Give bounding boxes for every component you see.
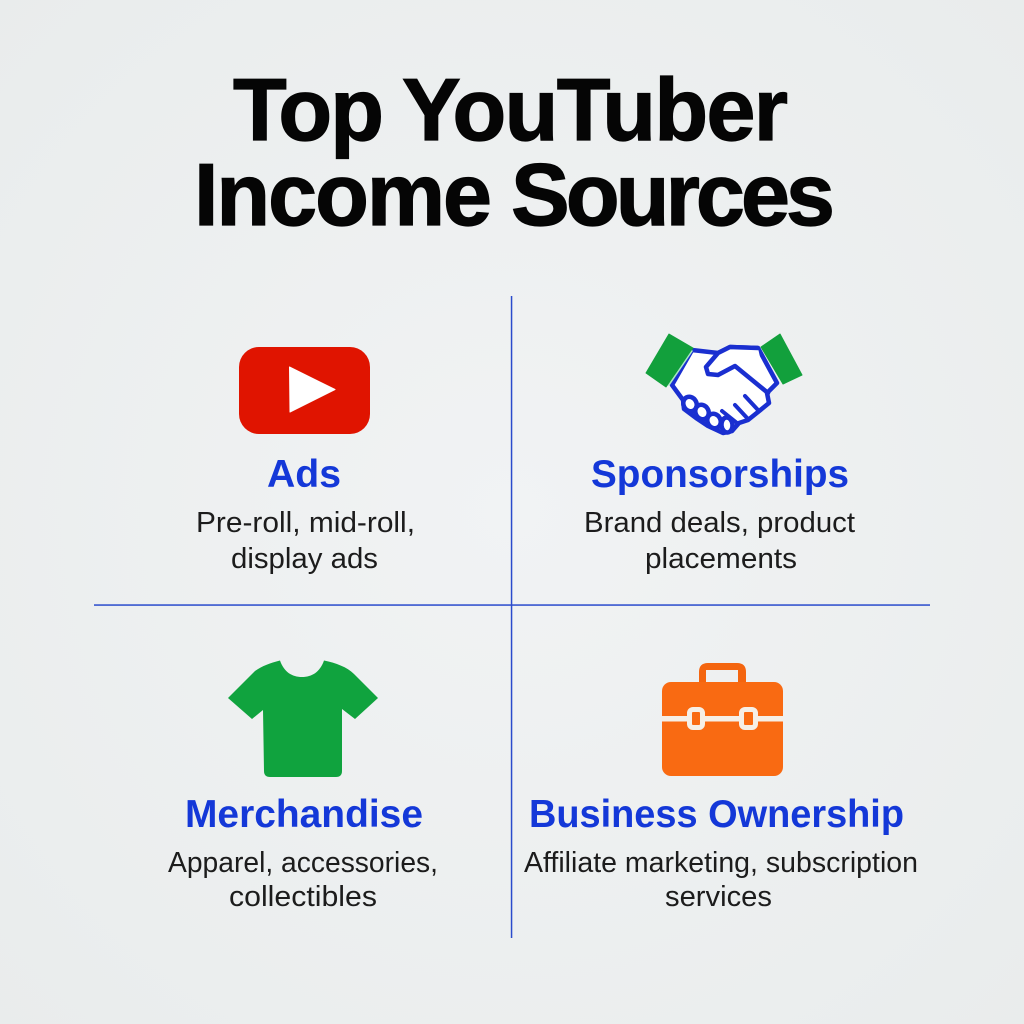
icon: t-shirt <box>228 660 378 777</box>
description: business ownership: Affiliate marketing, subscription <box>524 847 918 879</box>
description: ads <box>196 507 415 575</box>
panel: merchandise <box>168 660 438 913</box>
description: merchandise <box>168 847 438 913</box>
title: Sources <box>511 145 835 244</box>
description: ads: display ads <box>231 543 378 575</box>
title: Top <box>233 60 384 159</box>
description: sponsorships: placements <box>645 543 797 575</box>
description: ads: Pre-roll, mid-roll, <box>196 507 415 539</box>
description: sponsorships: Brand deals, product <box>584 507 855 539</box>
icon: video play button <box>239 347 370 434</box>
description: business ownership: services <box>665 881 772 913</box>
icon: handshake <box>646 334 802 433</box>
description: sponsorships <box>584 507 855 575</box>
heading: merchandise: Merchandise <box>185 793 423 836</box>
title: YouTuber <box>402 60 788 159</box>
title: Income <box>194 145 492 244</box>
heading: sponsorships: Sponsorships <box>591 453 849 496</box>
description: business ownership <box>524 847 918 913</box>
panel: sponsorships <box>584 334 855 575</box>
panel: ads <box>196 347 415 575</box>
heading: ads: Ads <box>267 453 341 496</box>
title <box>194 60 835 244</box>
icon: briefcase <box>662 663 783 776</box>
description: merchandise: Apparel, accessories, <box>168 847 438 879</box>
description: merchandise: collectibles <box>229 881 377 913</box>
heading: business ownership: Business Ownership <box>529 793 904 836</box>
panel: business ownership <box>524 663 918 913</box>
